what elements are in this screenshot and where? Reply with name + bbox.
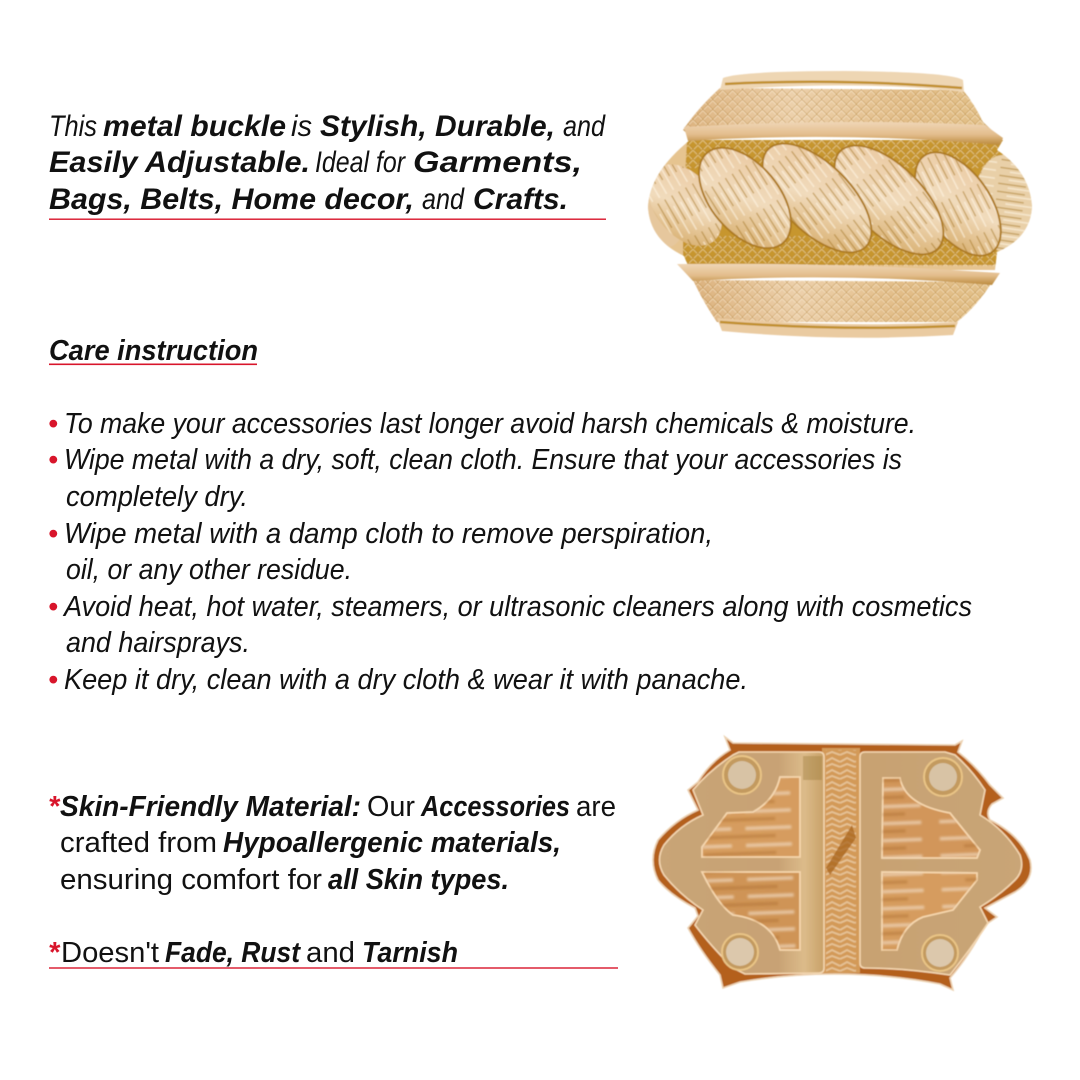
care instruction list: completely dry. xyxy=(66,481,248,513)
heading: care instruction: Care instruction xyxy=(49,335,258,367)
intro paragraph: and xyxy=(422,183,465,216)
intro paragraph: Stylish, Durable, xyxy=(320,110,555,143)
intro paragraph: Garments, xyxy=(413,146,582,179)
intro paragraph xyxy=(49,110,606,220)
fade rust tarnish note: and xyxy=(306,937,355,969)
top dome xyxy=(683,71,1003,145)
intro paragraph: Bags, Belts, Home decor, xyxy=(49,183,414,216)
intro paragraph: is xyxy=(291,110,312,143)
care instruction list: • xyxy=(48,591,58,623)
care instruction list: and hairsprays. xyxy=(66,627,250,659)
right plate xyxy=(860,752,1022,975)
bottom dome xyxy=(677,264,1000,338)
rope centre lobes and band xyxy=(648,139,1032,271)
care instruction list: To make your accessories last longer avoid harsh chemicals & moisture. xyxy=(64,408,916,440)
skin-friendly material note: Our xyxy=(367,791,415,823)
left plate xyxy=(660,752,824,974)
fade rust tarnish note: * xyxy=(48,937,61,969)
fade rust tarnish note xyxy=(48,937,618,969)
care instruction list: Wipe metal with a damp cloth to remove perspiration, xyxy=(64,518,713,550)
skin-friendly material note: Accessories xyxy=(420,791,570,823)
skin-friendly material note: * xyxy=(48,791,61,823)
skin-friendly material note: crafted from xyxy=(60,827,217,859)
intro paragraph: Ideal for xyxy=(315,146,406,179)
skin-friendly material note: are xyxy=(576,791,616,823)
outer frame xyxy=(653,737,1031,990)
care instruction list: • xyxy=(48,518,58,550)
centre strip xyxy=(822,748,860,973)
care instruction list: • xyxy=(48,408,58,440)
care instruction list: • xyxy=(48,664,58,696)
care instruction list: Wipe metal with a dry, soft, clean cloth. Ensure that your accessories is xyxy=(64,444,902,476)
care instruction list: Keep it dry, clean with a dry cloth & wear it with panache. xyxy=(64,664,748,696)
product photo: buckle front xyxy=(633,71,1035,338)
intro paragraph: metal buckle xyxy=(103,110,286,143)
skin-friendly material note xyxy=(48,791,616,896)
care instruction list: oil, or any other residue. xyxy=(66,554,352,586)
intro paragraph: and xyxy=(563,110,606,143)
care instruction list: Avoid heat, hot water, steamers, or ultrasonic cleaners along with cosmetics xyxy=(62,591,972,623)
skin-friendly material note: all Skin types. xyxy=(328,864,509,896)
product photo: buckle back xyxy=(653,737,1031,990)
fade rust tarnish note: Fade, Rust xyxy=(165,937,301,969)
intro paragraph: Crafts. xyxy=(473,183,568,216)
intro paragraph: Easily Adjustable. xyxy=(49,146,310,179)
skin-friendly material note: Skin-Friendly Material: xyxy=(60,791,361,823)
care instruction list: • xyxy=(48,444,58,476)
intro paragraph: This xyxy=(49,110,97,143)
skin-friendly material note: ensuring comfort for xyxy=(60,864,322,896)
skin-friendly material note: Hypoallergenic materials, xyxy=(223,827,561,859)
fade rust tarnish note: Doesn't xyxy=(61,937,159,969)
care instruction list xyxy=(48,408,972,696)
fade rust tarnish note: Tarnish xyxy=(362,937,458,969)
rivets xyxy=(722,756,962,971)
